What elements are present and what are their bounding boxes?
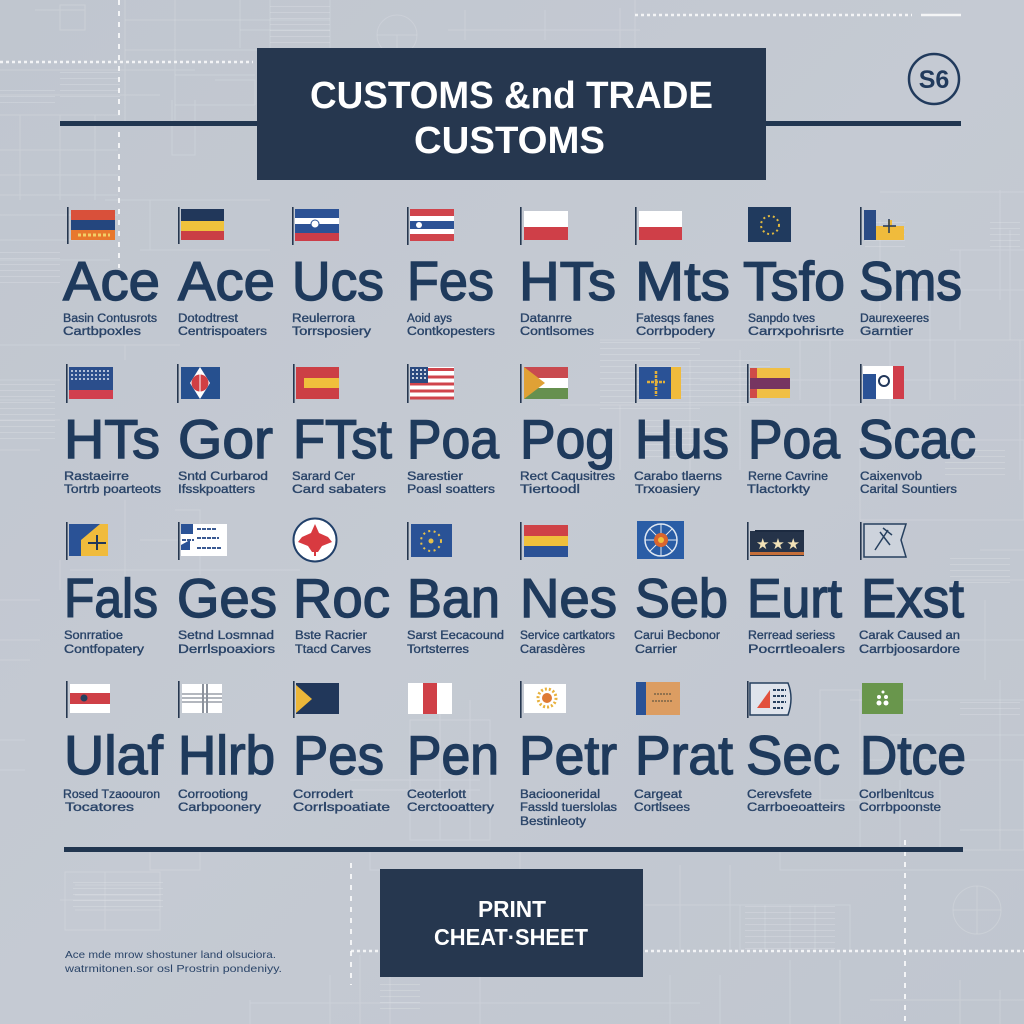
description: Rosed Tzaoouron <box>63 789 160 801</box>
cell: Petr <box>519 681 617 828</box>
flag <box>636 682 680 715</box>
flag <box>635 364 681 403</box>
description <box>748 313 844 338</box>
description: Carrier <box>635 644 677 656</box>
code: Gor <box>178 409 273 470</box>
button label: PRINT <box>478 896 546 922</box>
cell: Sec <box>746 681 845 814</box>
flag <box>635 207 682 245</box>
description: Rerread seriess <box>748 630 835 642</box>
description <box>634 471 722 496</box>
code: FTst <box>293 409 392 470</box>
cell: Mts <box>635 207 730 338</box>
description: Fatesqs fanes <box>636 313 714 325</box>
description: Cerevsfete <box>747 789 812 801</box>
code: Ucs <box>292 251 384 312</box>
flag <box>66 681 110 718</box>
description <box>520 313 594 338</box>
cell: Roc <box>293 518 390 656</box>
description: Rerne Cavrine <box>748 471 828 483</box>
description: Corrodert <box>293 789 354 801</box>
button label <box>434 896 588 950</box>
description: Garntier <box>860 326 913 338</box>
description <box>407 789 494 814</box>
code: Dtce <box>860 725 966 786</box>
description: Carak Caused an <box>859 630 960 642</box>
description: Datanrre <box>520 313 572 325</box>
description <box>860 471 957 496</box>
code: Ges <box>177 568 277 629</box>
description <box>634 789 690 814</box>
description: Carrxpohrisrte <box>748 326 844 338</box>
description: Corlbenltcus <box>859 789 934 801</box>
cell: Ucs <box>292 207 384 338</box>
cell: Exst <box>859 522 964 656</box>
cell: HTs <box>519 207 616 338</box>
description: Carrboeoatteirs <box>747 802 845 814</box>
description <box>859 630 960 656</box>
description <box>178 313 267 338</box>
code: Petr <box>519 725 617 786</box>
row 3 <box>64 518 964 656</box>
description <box>748 630 845 656</box>
description: Dotodtrest <box>178 313 239 325</box>
badge: S6 <box>909 54 959 104</box>
badge: S6: S6 <box>919 66 949 94</box>
description: Carrbjoosardore <box>859 644 960 656</box>
description: Contkopesters <box>407 326 495 338</box>
description: Carital Sountiers <box>860 484 957 496</box>
description <box>634 630 720 656</box>
flag <box>520 522 568 560</box>
description: Derrlspoaxiors <box>178 644 275 656</box>
flag <box>293 681 339 718</box>
flag <box>747 364 790 403</box>
description: Daurexeeres <box>860 313 929 325</box>
description: Baciooneridal <box>520 789 600 801</box>
code: Mts <box>635 251 730 312</box>
cell: Fes <box>407 207 495 338</box>
description: Carui Becbonor <box>634 630 720 642</box>
description: Service cartkators <box>520 630 615 642</box>
code: Scac <box>858 409 976 470</box>
description <box>860 313 929 338</box>
description: Rect Caqusitres <box>520 471 615 483</box>
description <box>747 789 845 814</box>
description <box>407 471 495 496</box>
flag <box>408 683 452 714</box>
flag <box>520 364 568 403</box>
cell: Hlrb <box>178 681 275 814</box>
flag <box>637 521 684 559</box>
code: Pes <box>293 725 384 786</box>
code: Sec <box>746 725 840 786</box>
cell: Ban <box>407 522 504 656</box>
flag <box>67 207 115 244</box>
description: Cortlsees <box>634 802 690 814</box>
description <box>520 630 615 656</box>
description <box>64 630 144 656</box>
cell: Gor <box>177 364 273 496</box>
description: Tortrb poarteots <box>64 484 161 496</box>
code: Nes <box>520 568 617 629</box>
description: Reulerrora <box>292 313 356 325</box>
cell: Hus <box>634 364 729 496</box>
cell: Pen <box>407 683 499 814</box>
description <box>63 313 157 338</box>
code: Hlrb <box>178 725 275 786</box>
code: Roc <box>293 568 390 629</box>
description: Tlactorkty <box>747 484 810 496</box>
description <box>295 630 371 656</box>
description: Setnd Losmnad <box>178 630 274 642</box>
description: Trxoasiery <box>635 484 700 496</box>
flag <box>860 207 904 245</box>
description: Tiertoodl <box>520 484 580 496</box>
code: Poa <box>407 409 500 470</box>
code: Ace <box>178 251 275 312</box>
cell: Tsfo <box>743 207 845 338</box>
description <box>63 789 160 814</box>
flag <box>747 681 791 718</box>
description: Poasl soatters <box>407 484 495 496</box>
row 1 <box>63 207 962 338</box>
description: Basin Contusrots <box>63 313 157 325</box>
flag <box>177 364 220 403</box>
description <box>178 471 268 496</box>
description: Cargeat <box>634 789 683 801</box>
cell: Eurt <box>747 522 845 656</box>
cell: Nes <box>520 522 617 656</box>
description <box>407 630 504 656</box>
row 4 <box>63 681 966 828</box>
print panel <box>380 869 643 977</box>
description: Corrootiong <box>178 789 248 801</box>
description: Contlsomes <box>520 326 594 338</box>
title panel <box>257 48 766 180</box>
cell: Pes <box>293 681 390 814</box>
button label: CHEAT·SHEET <box>434 924 588 950</box>
code: Tsfo <box>743 251 845 312</box>
description: Sanpdo tves <box>748 313 815 325</box>
flag <box>407 364 454 403</box>
description: Centrispoaters <box>178 326 267 338</box>
flag <box>520 681 566 718</box>
description: Fassld tuerslolas <box>520 802 617 814</box>
cell: Pog <box>520 364 615 496</box>
description: Corrbpodery <box>636 326 715 338</box>
code: Poa <box>748 409 841 470</box>
flag: ★★★ <box>756 536 800 553</box>
description: Sonrratioe <box>64 630 123 642</box>
code: Exst <box>861 568 964 629</box>
flag <box>66 364 113 403</box>
description: Tocatores <box>65 802 134 814</box>
description: Contfopatery <box>64 644 144 656</box>
code: Seb <box>635 568 728 629</box>
description <box>292 313 371 338</box>
description: Sarestier <box>407 471 463 483</box>
footer note: watrmitonen.sor osl Prostrin pondeniyy. <box>64 963 282 975</box>
flag <box>178 522 227 560</box>
cell: Seb <box>634 521 728 656</box>
description: Ceoterlott <box>407 789 467 801</box>
title: CUSTOMS <box>414 120 605 162</box>
flag <box>293 364 339 403</box>
cell: Poa <box>747 364 841 496</box>
description: Corrlspoatiate <box>293 802 390 814</box>
code: Hus <box>635 409 729 470</box>
description: Tortsterres <box>407 644 469 656</box>
flag <box>178 681 222 718</box>
description: Sarst Eecacound <box>407 630 504 642</box>
description <box>747 471 828 496</box>
flag <box>292 207 339 245</box>
flag <box>860 364 904 403</box>
description: Card sabaters <box>292 484 386 496</box>
cell: Ace <box>63 207 160 338</box>
description: Pocrrtleoalers <box>748 644 845 656</box>
header rule <box>60 121 961 126</box>
description: Sarard Cer <box>292 471 355 483</box>
flag <box>520 207 568 245</box>
cell: Dtce <box>859 683 966 814</box>
description: Corrbpoonste <box>859 802 941 814</box>
code: Ulaf <box>64 725 164 786</box>
code: Fals <box>64 568 158 629</box>
flag <box>178 207 224 244</box>
footer note <box>64 949 282 975</box>
code: Fes <box>407 251 494 312</box>
flag <box>66 522 108 560</box>
description <box>520 471 615 496</box>
footer rule <box>64 847 963 852</box>
description: Bste Racrier <box>295 630 367 642</box>
description <box>178 789 261 814</box>
cell: Sms <box>859 207 962 338</box>
cell: Ace <box>178 207 275 338</box>
description <box>178 630 275 656</box>
description <box>520 789 617 828</box>
flag <box>860 522 906 560</box>
description: Cerctooattery <box>407 802 494 814</box>
cell: FTst <box>292 364 392 496</box>
description <box>64 471 161 496</box>
description: Carabo tlaerns <box>634 471 722 483</box>
description: Carbpoonery <box>178 802 261 814</box>
description: Ttacd Carves <box>295 644 371 656</box>
description: Aoid ays <box>407 313 452 325</box>
description: Carasdères <box>520 644 585 656</box>
code: Pog <box>520 409 615 470</box>
description: Ifsskpoatters <box>178 484 255 496</box>
description <box>407 313 495 338</box>
row 2 <box>64 364 976 496</box>
description <box>292 471 386 496</box>
flag <box>748 207 791 242</box>
flag <box>862 683 903 714</box>
description: Caixenvob <box>860 471 922 483</box>
flag <box>407 522 452 560</box>
description <box>636 313 715 338</box>
cell: Ulaf <box>63 681 164 814</box>
cell: Poa <box>407 364 500 496</box>
description <box>859 789 941 814</box>
cell: Fals <box>64 522 158 656</box>
description: Cartbpoxles <box>63 326 141 338</box>
description <box>293 789 390 814</box>
footer note: Ace mde mrow shostuner land olsuciora. <box>65 949 276 961</box>
cell: Ges <box>177 522 277 656</box>
description: Bestinleoty <box>520 816 586 828</box>
cell: HTs <box>64 364 161 496</box>
title: CUSTOMS &nd TRADE <box>310 75 713 117</box>
description: Torrsposiery <box>292 326 371 338</box>
code: Prat <box>635 725 733 786</box>
emblem <box>294 518 336 562</box>
title <box>310 75 713 162</box>
code: Eurt <box>747 568 842 629</box>
flag <box>407 207 454 245</box>
code: Ace <box>63 251 160 312</box>
description: Rastaeirre <box>64 471 129 483</box>
code: HTs <box>519 251 616 312</box>
code: Ban <box>407 568 500 629</box>
code: Sms <box>859 251 962 312</box>
cell: Scac <box>858 364 976 496</box>
description: Sntd Curbarod <box>178 471 268 483</box>
cell: Prat <box>634 682 733 814</box>
code: HTs <box>64 409 160 470</box>
code: Pen <box>407 725 499 786</box>
